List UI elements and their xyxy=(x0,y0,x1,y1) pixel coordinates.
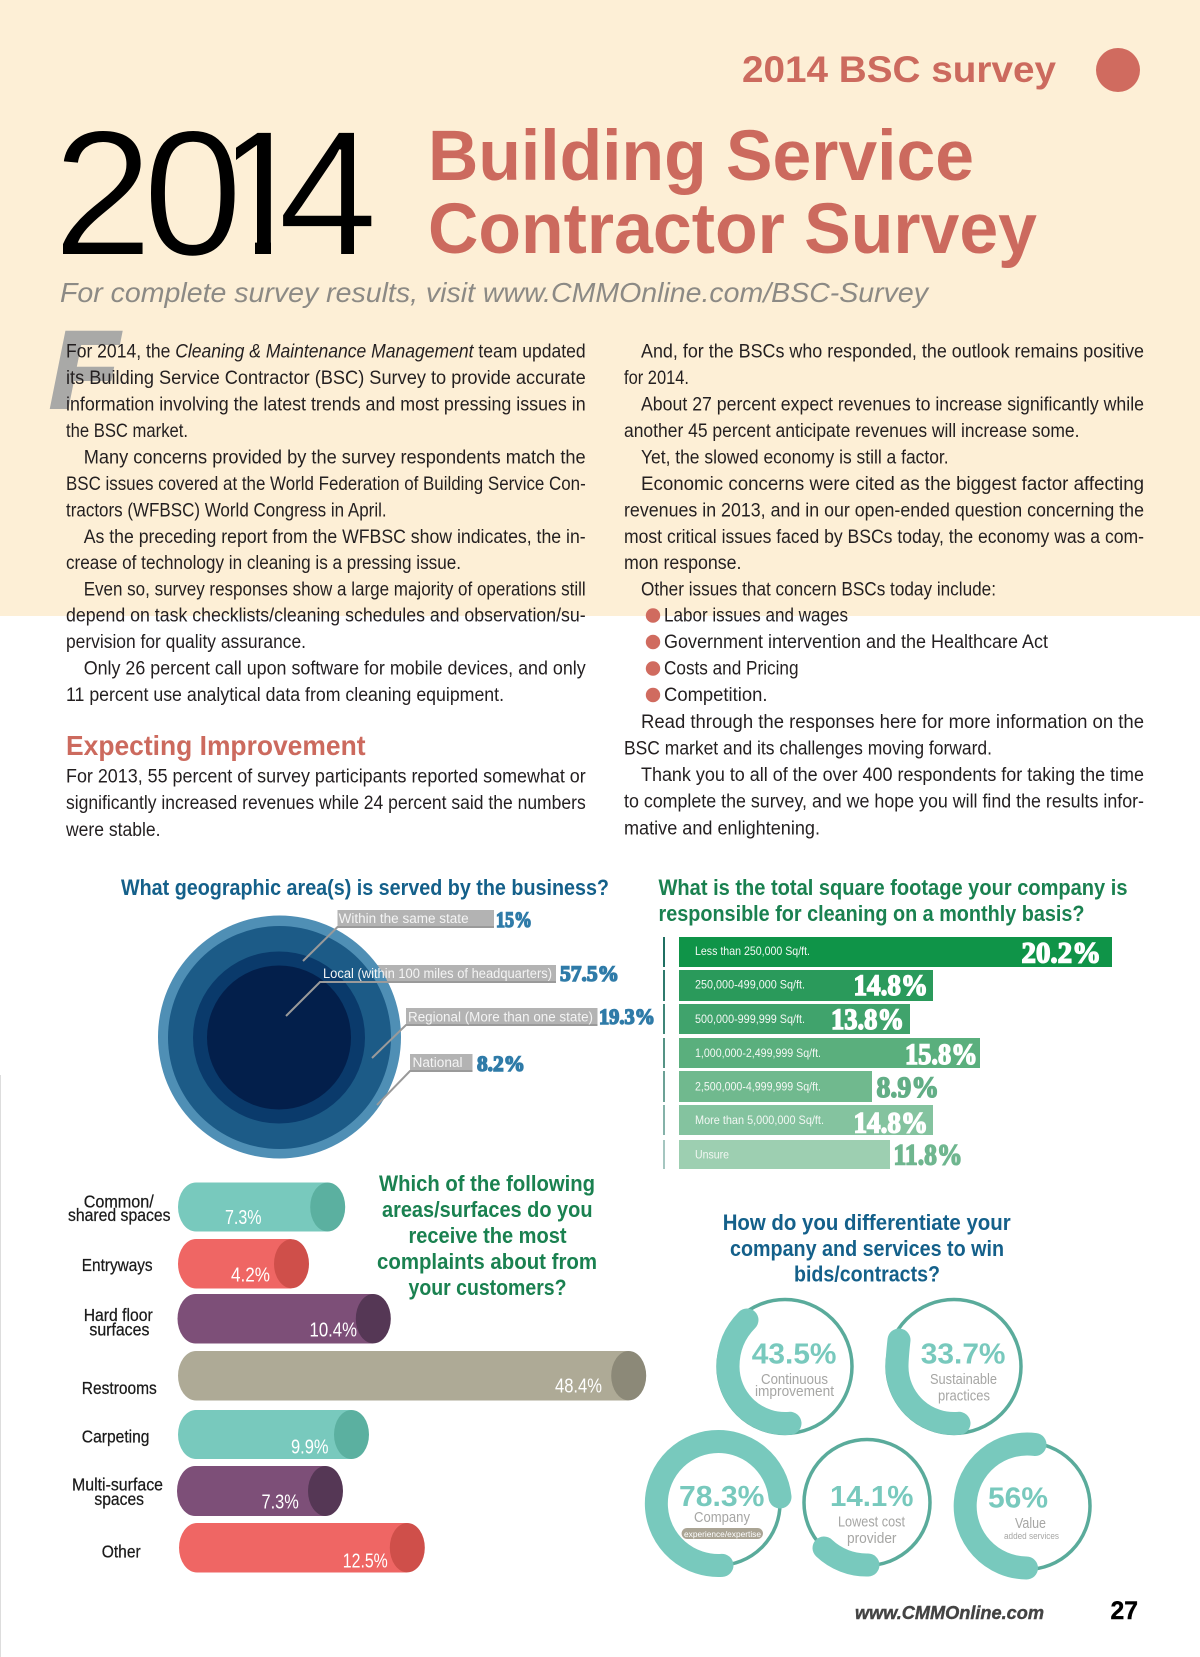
heading: square footage question: responsible for cleaning on a monthly basis? xyxy=(658,901,1084,926)
bulleted list of issues: Labor issues and wages xyxy=(664,606,848,627)
cylinder: entryways: Entryways xyxy=(82,1255,153,1275)
category labels: Regional (More than one state) xyxy=(408,1010,593,1025)
donut: lowest cost provider 14.1%: 14.1% xyxy=(830,1481,914,1513)
bar: less than 250,000: 20.2% xyxy=(1022,936,1101,970)
bar: 250,000-499,000: 250,000-499,000 Sq/ft. xyxy=(695,978,805,992)
footer: website url: www.CMMOnline.com xyxy=(855,1603,1044,1623)
heading: complaints question: areas/surfaces do you xyxy=(382,1197,592,1222)
text block: left article column: Even so, survey responses show a large majority of operations still xyxy=(84,580,586,600)
category labels: Within the same state xyxy=(339,911,469,926)
heading: complaints question: Which of the following xyxy=(379,1171,595,1196)
bar: 2,500,000-4,999,999: 8.9% xyxy=(876,1071,939,1104)
text block: right article column: BSC market and its challenges moving forward. xyxy=(624,738,992,760)
cylinder: hard floor surfaces: surfaces xyxy=(89,1320,150,1340)
text block: right article column: Read through the responses here for more information on the xyxy=(641,712,1144,733)
percentage values: 57.5% xyxy=(560,961,619,986)
title: Building Service Contractor Survey: Contractor Survey xyxy=(428,190,1037,269)
heading: complaints question: receive the most xyxy=(408,1223,567,1248)
bulleted list of issues: Costs and Pricing xyxy=(664,659,798,680)
panel: geographic area chart xyxy=(121,875,655,1158)
text block: left article column: BSC issues covered at the World Federation of Building Service Con- xyxy=(66,474,586,495)
percentage values xyxy=(477,907,655,1076)
bar: 500,000-999,999 xyxy=(679,1003,910,1036)
text block: right article column: Thank you to all of the over 400 respondents for taking the time xyxy=(641,765,1144,786)
bar: unsure: 11.8% xyxy=(894,1138,962,1172)
text block: right article column: mative and enlightening. xyxy=(624,818,820,840)
bar: less than 250,000: Less than 250,000 Sq/ft. xyxy=(695,944,810,958)
donut: sustainable practices 33.7%: practices xyxy=(938,1389,990,1405)
drop cap F: F xyxy=(49,309,122,432)
donut: continuous improvement 43.5% xyxy=(718,1300,852,1434)
bulleted list of issues: Competition. xyxy=(664,685,768,706)
text block: expecting improvement body: For 2013, 55 percent of survey participants reported somewhat or xyxy=(66,767,586,788)
text block: right article column: to complete the survey, and we hope you will find the results infor- xyxy=(624,792,1144,812)
cylinder: carpeting xyxy=(82,1410,369,1459)
title: 2014: 1 xyxy=(211,93,311,293)
donut: company experience/expertise 78.3%: Company xyxy=(694,1510,751,1526)
panel: square footage chart xyxy=(658,875,1128,1172)
concentric circle chart xyxy=(158,916,401,1158)
cylinder: restrooms: Restrooms xyxy=(82,1378,157,1398)
cylinder: common/shared spaces: Common/ xyxy=(84,1192,154,1212)
heading: differentiate question: company and services to win xyxy=(730,1236,1004,1261)
donut: value added services 56%: added services xyxy=(1004,1531,1059,1541)
cylinder: hard floor surfaces: 10.4% xyxy=(310,1320,357,1342)
cylinder: other: Other xyxy=(102,1542,141,1562)
heading: geographic area question: What geographic area(s) is served by the business? xyxy=(121,875,609,900)
donut: lowest cost provider 14.1% xyxy=(804,1440,930,1566)
title: 2014 xyxy=(63,131,372,256)
heading: differentiate question xyxy=(723,1210,1011,1287)
text block: expecting improvement body: were stable. xyxy=(65,820,160,841)
cylinder: common/shared spaces: 7.3% xyxy=(225,1207,262,1229)
text block: left article column: For 2014, the Cleaning & Maintenance Management team updated xyxy=(66,342,586,362)
text block: right article column: another 45 percent anticipate revenues will increase some. xyxy=(624,421,1080,442)
donut: lowest cost provider 14.1%: Lowest cost xyxy=(838,1515,905,1531)
donut: value added services 56%: 56% xyxy=(988,1482,1048,1514)
bar: unsure xyxy=(679,1138,962,1172)
bar: 2,500,000-4,999,999 xyxy=(679,1071,939,1104)
heading: differentiate question: bids/contracts? xyxy=(794,1262,940,1287)
percentage values: 8.2% xyxy=(477,1051,525,1076)
text block: left article column: As the preceding report from the WFBSC show indicates, the in- xyxy=(84,527,586,548)
cylinder: restrooms xyxy=(82,1351,646,1400)
bar: 1,000,000-2,499,999: 1,000,000-2,499,999 Sq/ft. xyxy=(695,1046,821,1060)
text block: left article column: 11 percent use analytical data from cleaning equipment. xyxy=(66,685,504,706)
title: 2014: 4 xyxy=(278,93,378,293)
text block: expecting improvement body xyxy=(65,767,586,841)
text block: right article column: Other issues that concern BSCs today include: xyxy=(641,580,996,600)
text block: left article column xyxy=(66,342,586,706)
panel: complaints cylinder chart xyxy=(68,1171,646,1573)
text block: left article column: Only 26 percent call upon software for mobile devices, and only xyxy=(84,659,586,680)
bulleted list of issues: Government intervention and the Healthcare Act xyxy=(664,632,1049,653)
subtitle: survey results link: For complete survey results, visit www.CMMOnline.com/BSC-Survey xyxy=(60,277,930,308)
title: Building Service Contractor Survey: Building Service xyxy=(428,117,974,196)
bar: 500,000-999,999: 13.8% xyxy=(831,1003,904,1036)
cylinder: multi-surface spaces xyxy=(72,1466,343,1516)
cylinder: entryways xyxy=(82,1239,309,1288)
cylinder: entryways: 4.2% xyxy=(231,1265,270,1287)
percentage values: 15% xyxy=(496,907,532,932)
bar: more than 5,000,000: 14.8% xyxy=(854,1106,928,1140)
text block: right article column: revenues in 2013, and in our open-ended question concerning the xyxy=(624,500,1144,522)
donut: continuous improvement 43.5%: improvement xyxy=(755,1384,834,1400)
heading: complaints question xyxy=(377,1171,597,1300)
text block: right article column: for 2014. xyxy=(624,368,689,389)
text block: right article column: Yet, the slowed economy is still a factor. xyxy=(641,448,949,468)
bar: 250,000-499,000 xyxy=(679,969,933,1002)
bar: more than 5,000,000: More than 5,000,000 Sq/ft. xyxy=(695,1113,824,1127)
text block: left article column: tractors (WFBSC) World Congress in April. xyxy=(66,500,387,522)
bar: 1,000,000-2,499,999: 15.8% xyxy=(905,1038,978,1071)
cylinder: common/shared spaces xyxy=(68,1182,345,1232)
bar: 2,500,000-4,999,999: 2,500,000-4,999,999 Sq/ft. xyxy=(695,1080,821,1094)
donut: sustainable practices 33.7%: 33.7% xyxy=(921,1338,1006,1370)
bar: less than 250,000 xyxy=(679,936,1112,970)
bar: 1,000,000-2,499,999 xyxy=(679,1038,980,1071)
donut: sustainable practices 33.7% xyxy=(887,1300,1021,1434)
leader lines xyxy=(286,927,598,1105)
category labels xyxy=(323,911,593,1070)
text block: left article column: pervision for quality assurance. xyxy=(66,632,306,653)
panel: differentiation donut charts xyxy=(656,1210,1090,1570)
cylinder: multi-surface spaces: spaces xyxy=(94,1489,144,1509)
donut: sustainable practices 33.7%: Sustainable xyxy=(930,1372,997,1388)
bar: 500,000-999,999: 500,000-999,999 Sq/ft. xyxy=(695,1012,805,1026)
cylinder: restrooms: 48.4% xyxy=(555,1376,602,1398)
cylinder: other xyxy=(102,1523,425,1573)
text block: right article column: About 27 percent expect revenues to increase significantly while xyxy=(641,394,1144,416)
category labels: Local (within 100 miles of headquarters) xyxy=(323,966,552,981)
donut: continuous improvement 43.5%: 43.5% xyxy=(752,1338,837,1370)
axis ticks xyxy=(663,937,665,1169)
donut: company experience/expertise 78.3%: 78.3% xyxy=(679,1481,765,1513)
cylinder: multi-surface spaces: Multi-surface xyxy=(72,1475,163,1495)
text block: left article column: information involving the latest trends and most pressing issues in xyxy=(66,394,586,416)
donut: value added services 56%: Value xyxy=(1015,1516,1046,1532)
bar: unsure: Unsure xyxy=(695,1148,729,1162)
bar: more than 5,000,000 xyxy=(679,1105,933,1140)
section label: 2014 BSC survey: 2014 BSC survey xyxy=(742,49,1056,90)
donut: company experience/expertise 78.3% xyxy=(656,1442,780,1566)
text block: right article column: mon response. xyxy=(624,553,742,574)
label bars behind the circle xyxy=(320,910,598,1072)
bulleted list of issues xyxy=(646,606,1049,706)
cylinder: multi-surface spaces: 7.3% xyxy=(262,1492,299,1514)
title: 2014: 20 xyxy=(53,93,243,293)
category labels: National xyxy=(412,1055,463,1070)
cylinder: carpeting: Carpeting xyxy=(82,1427,150,1447)
text block: right article column: Economic concerns were cited as the biggest factor affecting xyxy=(641,474,1144,495)
cylinder: other: 12.5% xyxy=(343,1551,388,1573)
donut: company experience/expertise 78.3%: experience/expertise xyxy=(684,1529,761,1539)
icon: section dot xyxy=(1096,48,1140,92)
text block: left article column: the BSC market. xyxy=(66,421,188,442)
cylinder: hard floor surfaces: Hard floor xyxy=(84,1305,153,1325)
text block: expecting improvement body: significantly increased revenues while 24 percent said the numbers xyxy=(66,793,586,814)
text block: left article column: its Building Service Contractor (BSC) Survey to provide accurate xyxy=(66,368,586,389)
donut: lowest cost provider 14.1%: provider xyxy=(847,1531,897,1547)
footer: page number: 27 xyxy=(1110,1597,1138,1625)
heading: differentiate question: How do you differentiate your xyxy=(723,1210,1011,1235)
title: Building Service Contractor Survey xyxy=(428,117,1037,269)
bar: 250,000-499,000: 14.8% xyxy=(854,969,928,1002)
text block: right article column: And, for the BSCs who responded, the outlook remains positive xyxy=(641,342,1144,362)
text block: left article column: Many concerns provided by the survey respondents match the xyxy=(84,448,586,468)
heading: Expecting Improvement: Expecting Improvement xyxy=(66,730,366,761)
donut: continuous improvement 43.5%: Continuous xyxy=(761,1372,828,1388)
heading: complaints question: your customers? xyxy=(408,1275,566,1300)
text block: right article column: most critical issues faced by BSCs today, the economy was a com- xyxy=(624,527,1144,548)
text block: left article column: crease of technology in cleaning is a pressing issue. xyxy=(66,553,461,574)
text block: left article column: depend on task checklists/cleaning schedules and observation/su- xyxy=(66,606,586,627)
cylinder: carpeting: 9.9% xyxy=(291,1437,329,1459)
donut: value added services 56% xyxy=(963,1442,1090,1570)
cylinder: common/shared spaces: shared spaces xyxy=(68,1205,171,1225)
cylinder: hard floor surfaces xyxy=(84,1294,391,1344)
panel: cream header background xyxy=(0,0,1200,616)
heading: complaints question: complaints about from xyxy=(377,1249,597,1274)
heading: square footage question: What is the total square footage your company is xyxy=(658,875,1128,900)
text block: right article column xyxy=(624,342,1144,840)
heading: square footage question xyxy=(658,875,1128,926)
percentage values: 19.3% xyxy=(599,1004,655,1029)
